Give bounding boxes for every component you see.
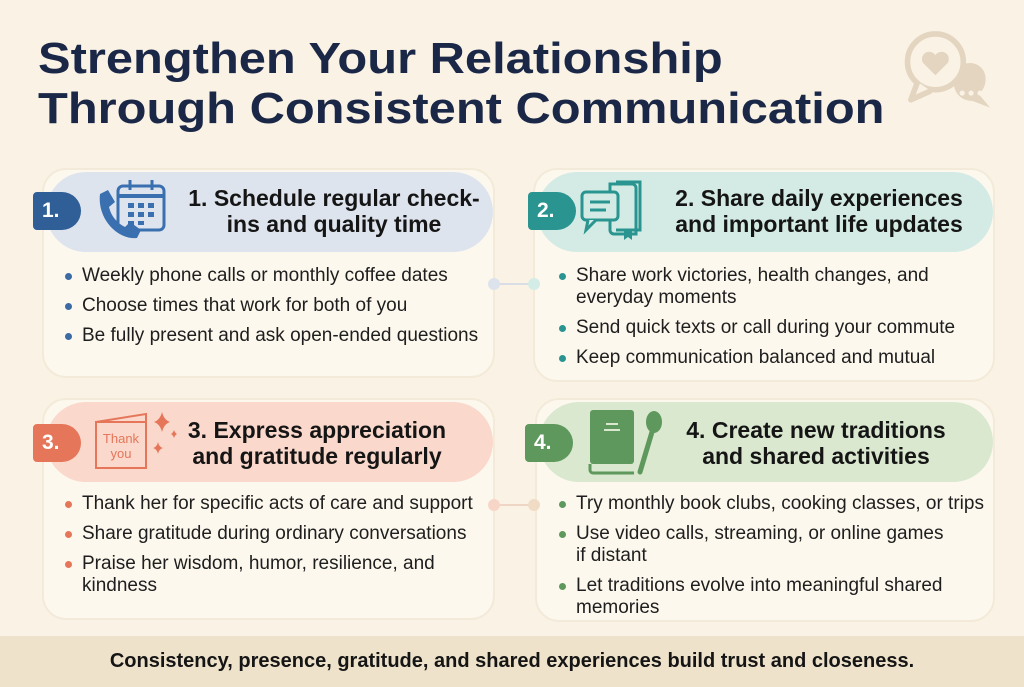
heading 1: ins and quality time	[227, 211, 441, 237]
icon: thank you card	[95, 412, 177, 469]
icon: book and spoon	[588, 410, 662, 474]
badge 1	[33, 192, 81, 230]
badge 3: 3.	[42, 431, 60, 454]
bullets 4: Let traditions evolve into meaningful shared	[576, 575, 943, 596]
bullets 2	[559, 265, 955, 368]
panel 1	[42, 168, 495, 378]
bullets 1: Weekly phone calls or monthly coffee dates	[82, 265, 448, 286]
heading 2: and important life updates	[675, 211, 963, 237]
panel 3	[42, 398, 495, 620]
icon: chat and book	[580, 180, 642, 240]
heading 3: 3. Express appreciation	[188, 417, 446, 443]
bullets 4	[559, 493, 984, 618]
icon: phone calendar	[100, 180, 166, 238]
bullets 1	[65, 265, 478, 346]
bullets 4: Try monthly book clubs, cooking classes, or trips	[576, 493, 984, 514]
footer: Consistency, presence, gratitude, and shared experiences build trust and closeness.	[110, 650, 914, 672]
footer	[0, 636, 1024, 687]
badge 4: 4.	[534, 431, 552, 454]
connector 3-4	[488, 499, 540, 511]
bullets 1: Be fully present and ask open-ended questions	[82, 325, 478, 346]
badge 1: 1.	[42, 199, 60, 222]
heading 1: 1. Schedule regular check-	[188, 185, 480, 211]
bullets 3	[65, 493, 473, 596]
icon: chat bubbles	[904, 31, 990, 108]
heading 4: and shared activities	[702, 443, 930, 469]
bullets 4: if distant	[576, 545, 647, 566]
bullets 1: Choose times that work for both of you	[82, 295, 407, 316]
bullets 3: Share gratitude during ordinary conversations	[82, 523, 466, 544]
bullets 2: Send quick texts or call during your commute	[576, 317, 955, 338]
badge 2	[528, 192, 576, 230]
badge 2: 2.	[537, 199, 555, 222]
title: Through Consistent Communication	[38, 84, 885, 133]
bullets 2: Share work victories, health changes, and	[576, 265, 929, 286]
bullets 4: memories	[576, 597, 659, 618]
heading 4: 4. Create new traditions	[686, 417, 946, 443]
panel 2	[533, 168, 995, 382]
bullets 3: Praise her wisdom, humor, resilience, and	[82, 553, 435, 574]
heading 2	[675, 185, 963, 237]
heading 4	[686, 417, 946, 469]
bullets 4: Use video calls, streaming, or online games	[576, 523, 944, 544]
bullets 3: kindness	[82, 575, 157, 596]
panel 4	[535, 398, 995, 622]
heading 1	[188, 185, 480, 237]
icon: thank you card: you	[111, 446, 131, 461]
title	[38, 34, 885, 133]
heading 2: 2. Share daily experiences	[675, 185, 963, 211]
heading 3: and gratitude regularly	[192, 443, 442, 469]
bullets 2: Keep communication balanced and mutual	[576, 347, 935, 368]
title: Strengthen Your Relationship	[38, 34, 723, 83]
heading 3	[188, 417, 446, 469]
bullets 3: Thank her for specific acts of care and support	[82, 493, 473, 514]
icon: thank you card: Thank	[103, 431, 140, 446]
badge 3	[33, 424, 81, 462]
connector 1-2	[488, 278, 540, 290]
badge 4	[525, 424, 573, 462]
bullets 2: everyday moments	[576, 287, 737, 308]
